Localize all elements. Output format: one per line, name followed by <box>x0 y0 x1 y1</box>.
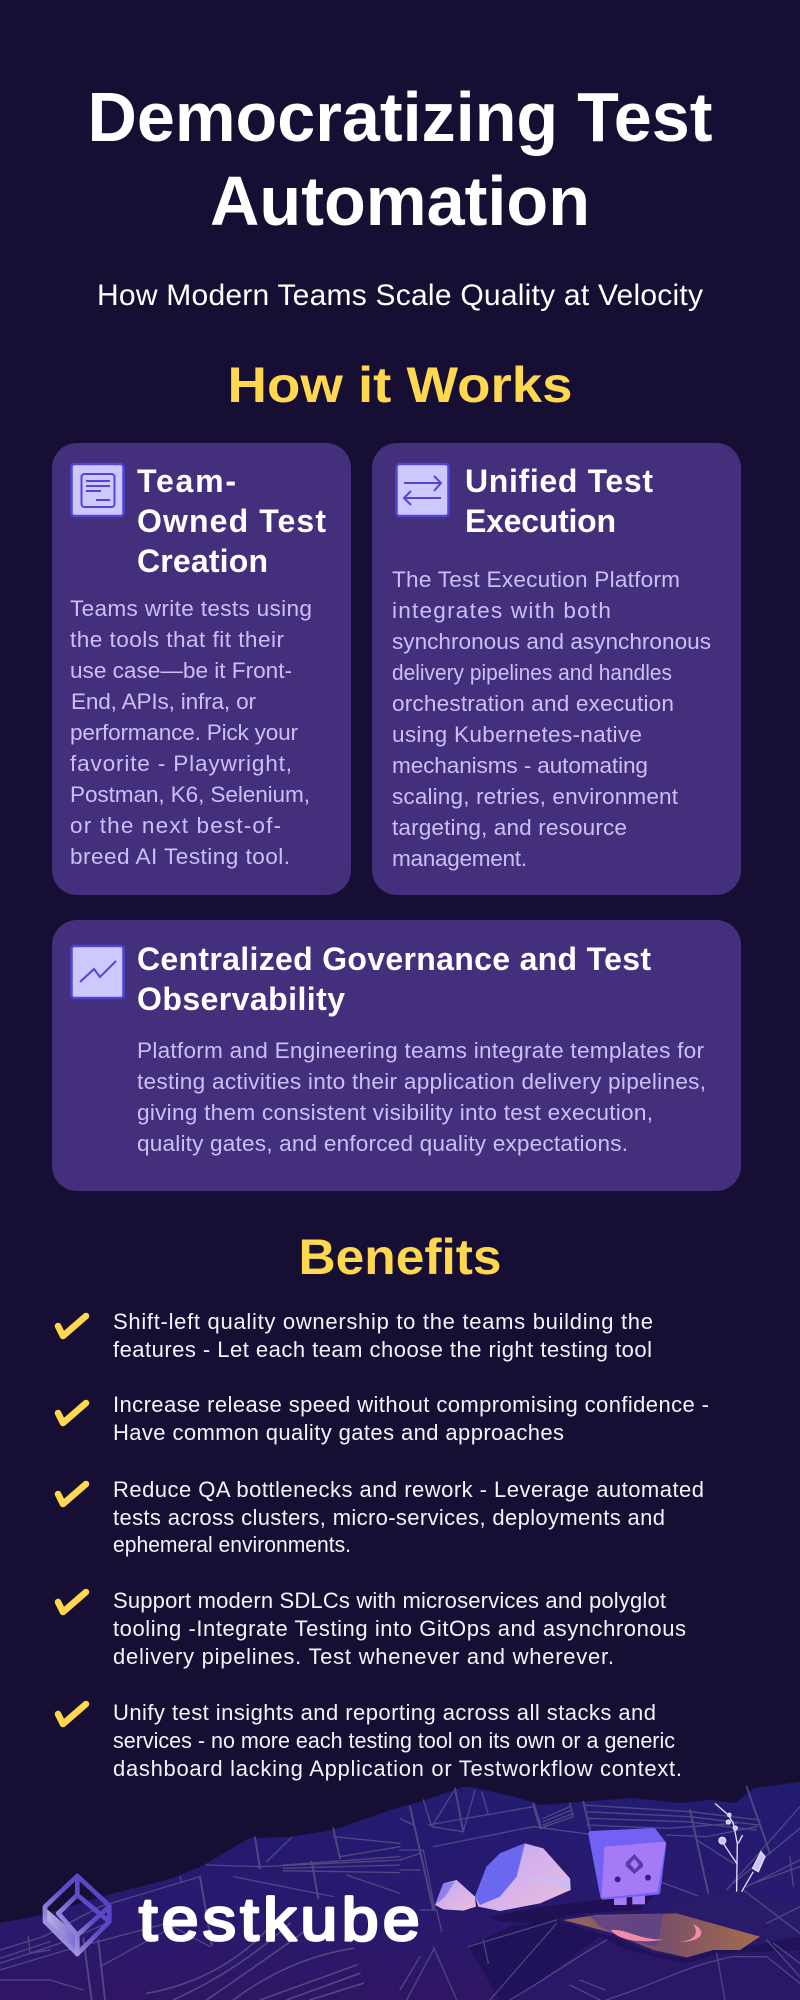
benefit text: tests across clusters, micro-services, deployments and <box>113 1505 665 1530</box>
icon: check mark <box>58 1592 86 1612</box>
card body text: End, APIs, infra, or <box>71 689 256 714</box>
benefit text: Reduce QA bottlenecks and rework - Leverage automated <box>113 1477 704 1502</box>
title: Automation <box>210 162 590 240</box>
card heading: Execution <box>465 503 616 539</box>
card body text: mechanisms - automating <box>392 753 648 778</box>
robot mascot <box>591 1831 664 1905</box>
icon: document <box>72 464 124 516</box>
panel: unified test execution <box>372 443 741 895</box>
card body text <box>137 1038 706 1156</box>
benefit text: delivery pipelines. Test whenever and wherever. <box>113 1644 614 1669</box>
card body text: management. <box>392 846 527 871</box>
benefit text: services - no more each testing tool on its own or a generic <box>113 1728 675 1753</box>
robot eyes <box>615 1875 651 1882</box>
logo: testkube <box>44 1876 424 1955</box>
icon: check mark <box>58 1484 86 1504</box>
terrain lines: right half <box>400 1787 800 2000</box>
card body text: scaling, retries, environment <box>392 784 679 809</box>
card heading <box>137 941 651 1017</box>
card heading: Observability <box>137 981 345 1017</box>
title: Democratizing Test <box>88 78 712 156</box>
benefit text <box>113 1588 686 1669</box>
plant <box>715 1803 765 1892</box>
wordmark: testkube <box>139 1886 424 1953</box>
card body text: targeting, and resource <box>392 815 627 840</box>
benefit text: Support modern SDLCs with microservices and polyglot <box>113 1588 666 1613</box>
benefit text <box>113 1477 704 1557</box>
benefit text: Unify test insights and reporting across all stacks and <box>113 1700 656 1725</box>
benefit 3 <box>58 1477 704 1557</box>
koi fish <box>680 1924 701 1942</box>
title <box>88 78 712 240</box>
card body text: favorite - Playwright, <box>70 751 292 776</box>
card body text: testing activities into their application delivery pipelines, <box>137 1069 706 1094</box>
benefit text: Shift-left quality ownership to the teams building the <box>113 1309 653 1334</box>
benefit text <box>113 1392 709 1445</box>
robot logo mark <box>626 1854 643 1874</box>
card body text <box>70 596 312 869</box>
benefit text: features - Let each team choose the right testing tool <box>113 1337 652 1362</box>
benefit 2 <box>58 1392 709 1445</box>
card body text: quality gates, and enforced quality expectations. <box>137 1131 628 1156</box>
pond <box>563 1913 760 1957</box>
card body text: breed AI Testing tool. <box>70 844 290 869</box>
card body text: the tools that fit their <box>70 627 284 652</box>
foreground hills <box>468 1888 800 2000</box>
card heading: Creation <box>137 543 268 579</box>
icon: trend line <box>72 946 124 998</box>
card body text: giving them consistent visibility into test execution, <box>137 1100 653 1125</box>
card heading <box>137 463 326 579</box>
robot shadow <box>490 1893 657 1923</box>
card body text: Postman, K6, Selenium, <box>70 782 310 807</box>
card body text <box>392 567 711 871</box>
card body text: Teams write tests using <box>70 596 312 621</box>
icon: cube mark <box>44 1876 109 1955</box>
card body text: integrates with both <box>392 598 611 623</box>
card body text: synchronous and asynchronous <box>392 629 711 654</box>
large rock <box>475 1843 571 1911</box>
heading: benefits: Benefits <box>298 1229 502 1285</box>
benefit text <box>113 1700 682 1781</box>
card heading: Centralized Governance and Test <box>137 941 651 977</box>
terrain lines: left half <box>0 1828 400 2000</box>
card heading: Unified Test <box>465 463 653 499</box>
benefit text <box>113 1309 653 1362</box>
card body text: using Kubernetes-native <box>392 722 642 747</box>
card body text: orchestration and execution <box>392 691 674 716</box>
benefit 5 <box>58 1700 682 1781</box>
heading: how it works: How it Works <box>228 357 572 413</box>
benefit 4 <box>58 1588 686 1669</box>
panel: team-owned test creation <box>52 443 351 895</box>
panel: centralized governance and test observability <box>52 920 741 1191</box>
card heading: Team- <box>137 463 236 499</box>
benefit text: tooling -Integrate Testing into GitOps and asynchronous <box>113 1616 686 1641</box>
icon: check mark <box>58 1316 86 1336</box>
benefit text: Have common quality gates and approaches <box>113 1420 564 1445</box>
card body text: or the next best-of- <box>70 813 281 838</box>
benefit text: ephemeral environments. <box>113 1532 351 1557</box>
card body text: performance. Pick your <box>70 720 298 745</box>
card heading: Owned Test <box>137 503 326 539</box>
card body text: use case—be it Front- <box>70 658 292 683</box>
icon: check mark <box>58 1403 86 1423</box>
koi fish <box>611 1930 663 1941</box>
small rock <box>435 1880 476 1911</box>
subtitle: How Modern Teams Scale Quality at Velocity <box>97 279 703 312</box>
card body text: delivery pipelines and handles <box>392 660 672 685</box>
card body text: Platform and Engineering teams integrate templates for <box>137 1038 704 1063</box>
illustration: landscape <box>0 1782 800 2000</box>
benefit text: Increase release speed without compromising confidence - <box>113 1392 709 1417</box>
card heading <box>465 463 653 539</box>
benefit text: dashboard lacking Application or Testworkflow context. <box>113 1756 682 1781</box>
icon: exchange arrows <box>396 464 448 516</box>
card body text: The Test Execution Platform <box>392 567 680 592</box>
benefit 1 <box>58 1309 653 1362</box>
icon: check mark <box>58 1704 86 1724</box>
